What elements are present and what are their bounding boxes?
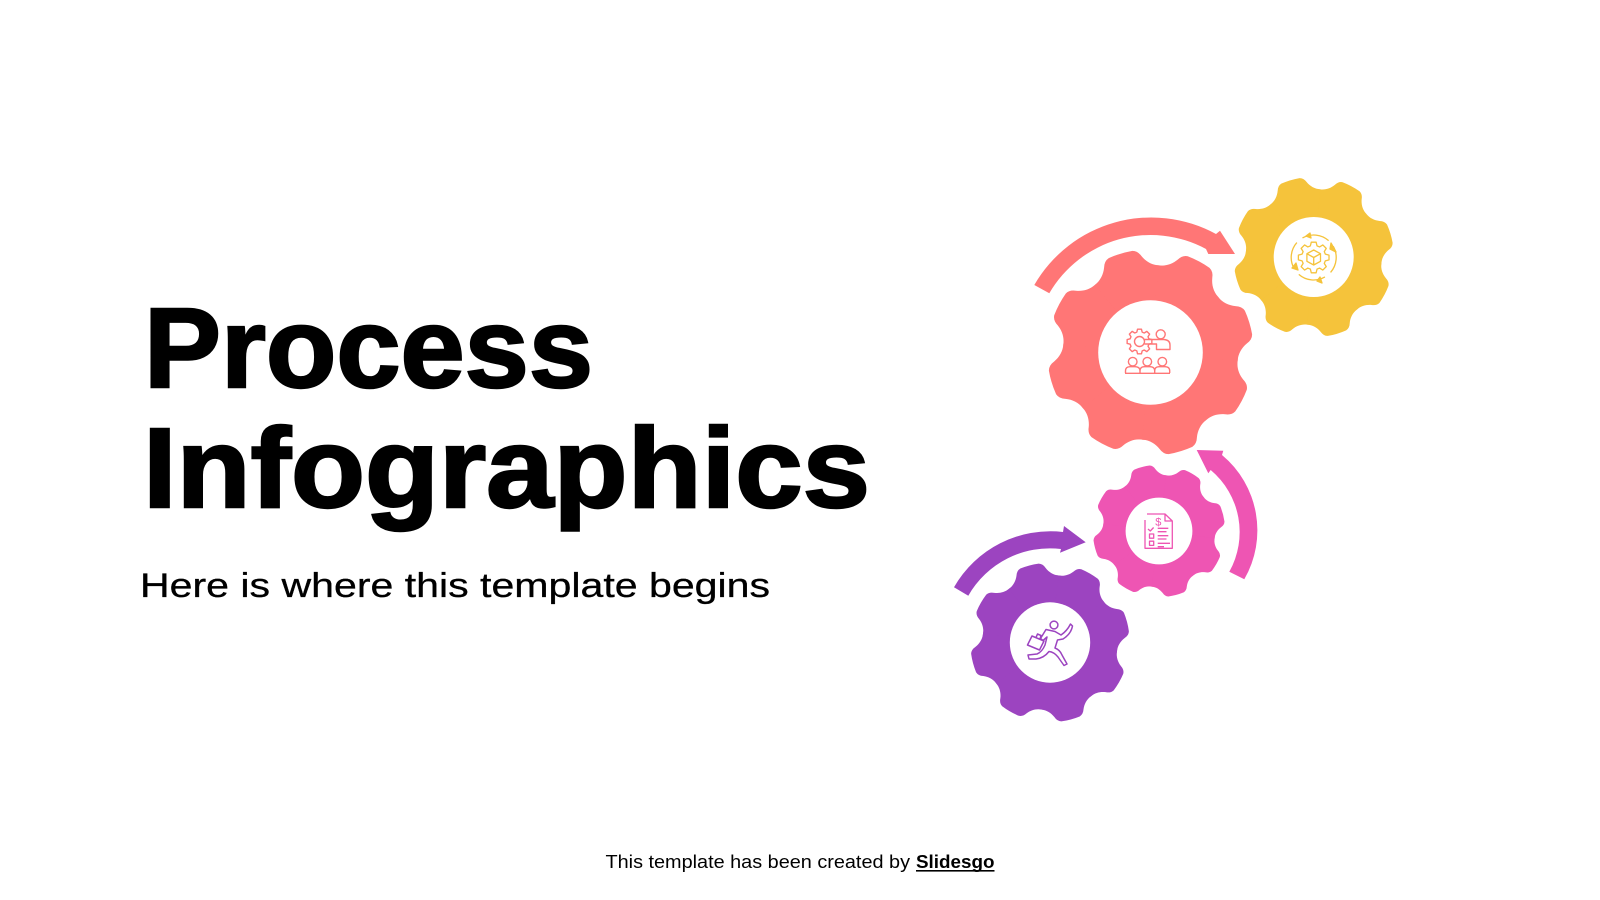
gear: pink (1078, 450, 1240, 612)
arrow: coral to yellow (1034, 217, 1235, 293)
icon: package in gear (1283, 227, 1344, 288)
title: Infographics (143, 405, 870, 531)
icon: team and key gear (1125, 329, 1170, 373)
title: Process (144, 285, 593, 411)
arrow: purple to pink (954, 526, 1086, 596)
gear: coral (1022, 224, 1279, 481)
icon: running businessperson (1028, 621, 1072, 666)
footer credit: This template has been created by (606, 851, 911, 872)
arrow: pink to coral (1197, 450, 1257, 579)
subtitle: Here is where this template begins (140, 567, 770, 605)
icon: invoice document: $ (1155, 516, 1161, 528)
gear: yellow (1214, 157, 1414, 357)
footer credit: Slidesgo (916, 851, 994, 872)
icon: invoice document (1145, 514, 1172, 548)
gear: purple (952, 545, 1148, 740)
title (143, 285, 870, 531)
